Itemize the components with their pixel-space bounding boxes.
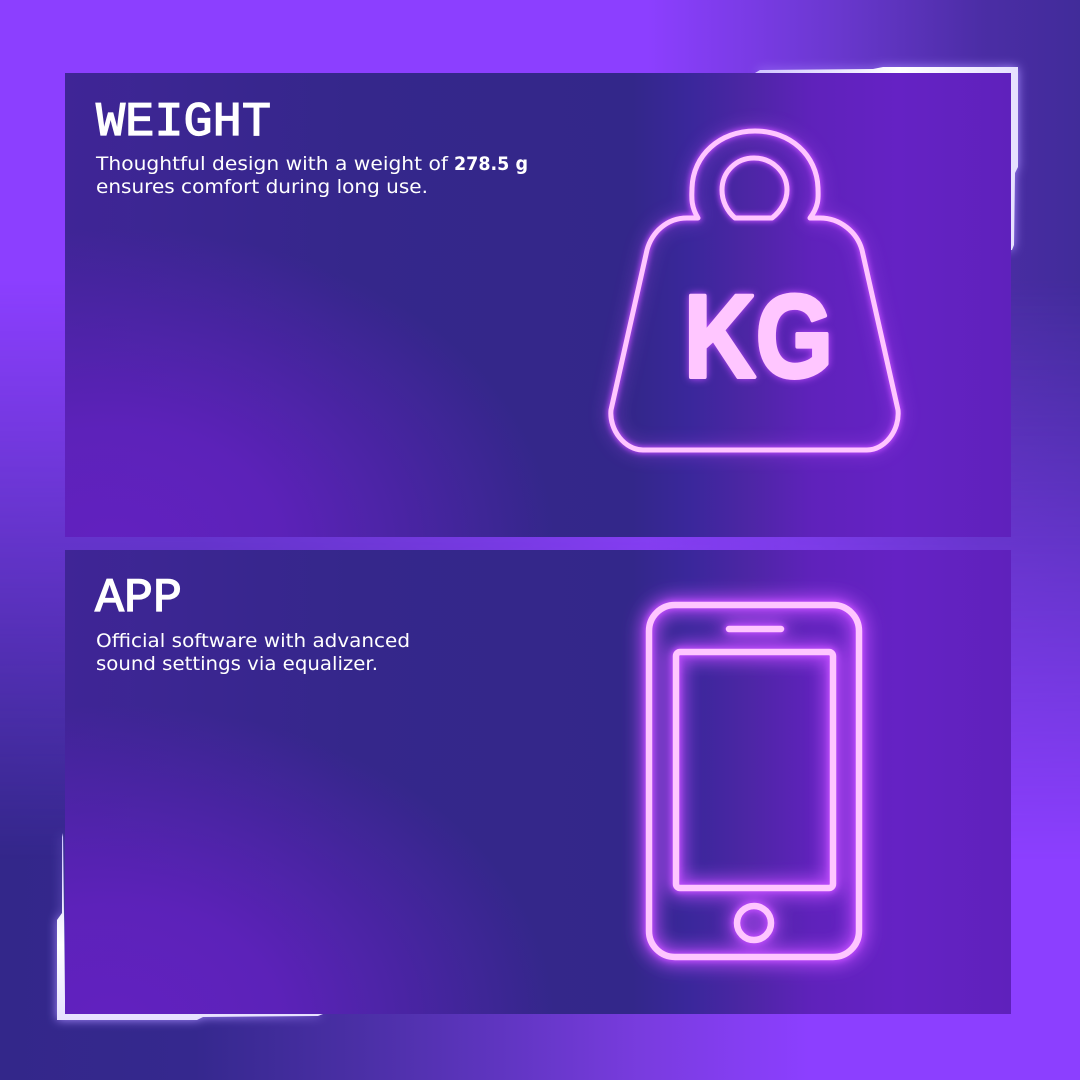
icon: neon smartphone [649,605,859,957]
text block: app description [96,630,410,675]
text block: app description: Official software with advanced [96,630,410,652]
heading: weight: WEIGHT [96,96,271,150]
panel: weight [65,73,1011,537]
text block: weight description [95,153,528,198]
panel: app [65,550,1011,1014]
text block: weight description: 278.5 g [454,153,528,175]
text block: weight description: ensures comfort during long use. [96,176,428,198]
icon: neon kettlebell weight [611,131,898,450]
text block: weight description: Thoughtful design with a weight of [95,153,449,175]
icon label: KG: KG [684,271,833,403]
heading: app: APP [95,572,182,626]
text block: app description: sound settings via equalizer. [96,653,378,675]
